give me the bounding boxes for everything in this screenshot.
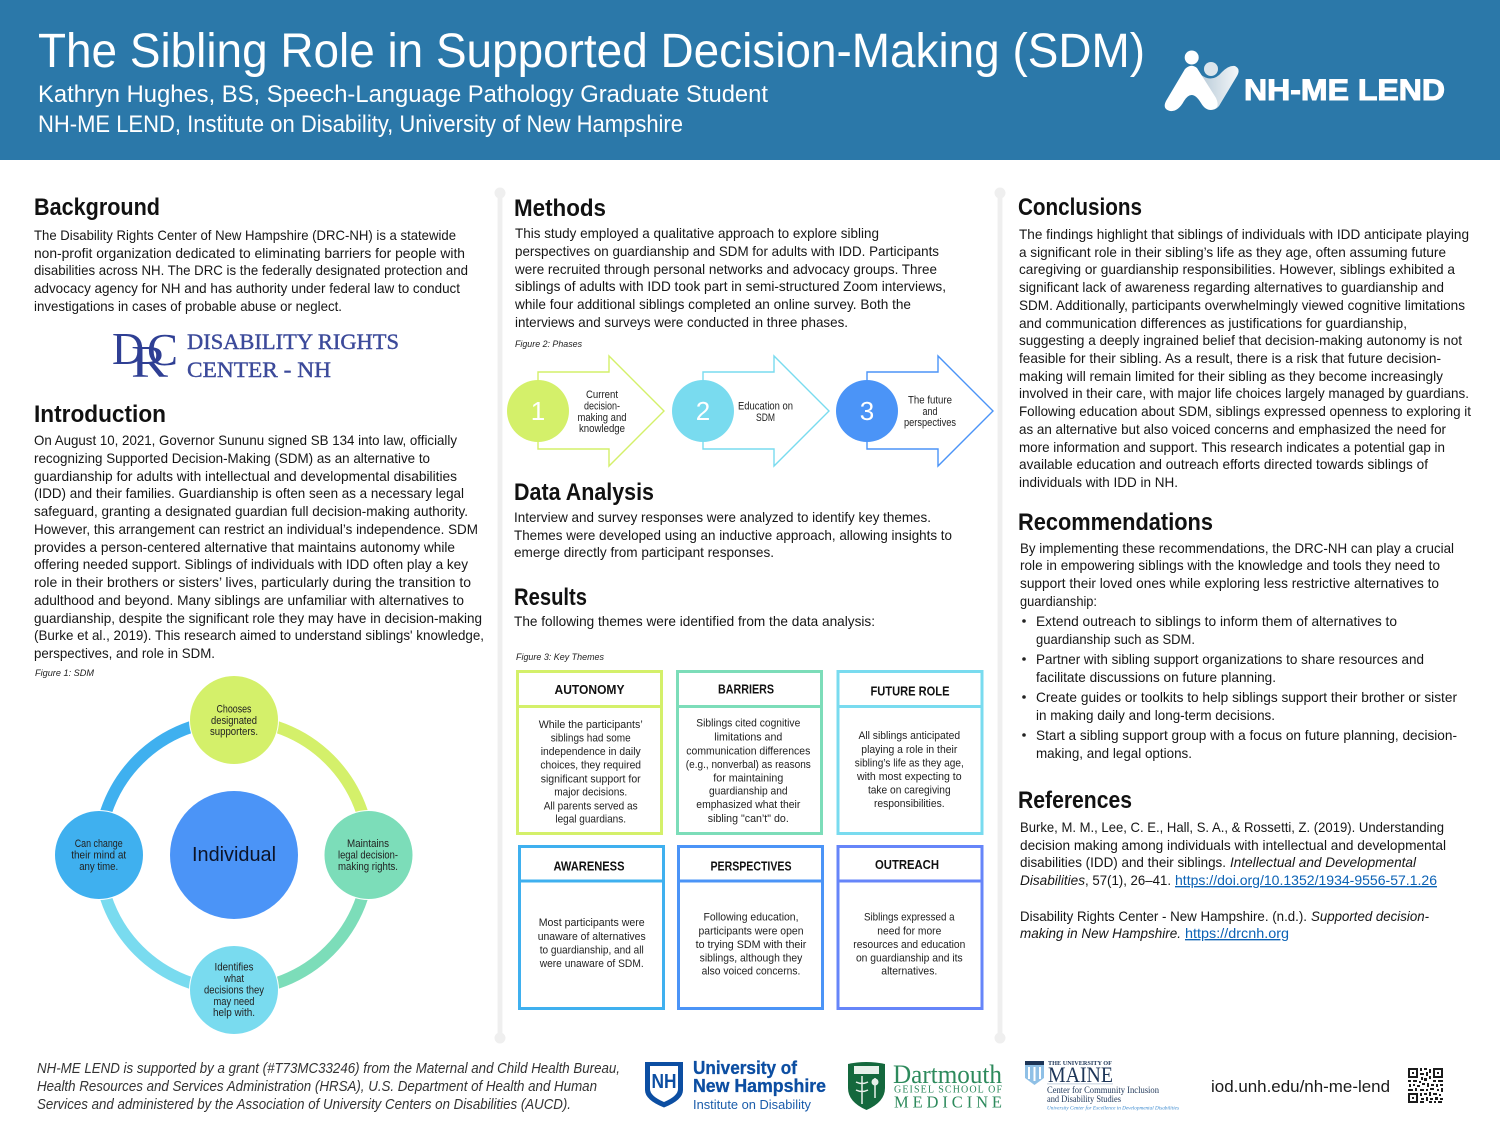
theme card: outreach: OUTREACH (875, 857, 939, 872)
reference: Burke et al.: decision making among individuals with intellectual and developmental (1020, 838, 1446, 853)
text block: introduction (34, 433, 484, 661)
bullet list: recommendations: Create guides or toolkits to help siblings support their brother or sister (1036, 690, 1457, 705)
node: can change mind: any time. (79, 861, 118, 873)
center circle (170, 791, 298, 919)
text block: methods: This study employed a qualitative approach to explore sibling (515, 226, 879, 241)
text block: introduction: perspectives, and role in SDM. (34, 646, 215, 661)
text block: recommendations intro (1020, 541, 1454, 609)
theme card: autonomy: While the participants’ (539, 719, 643, 731)
text block: background: advocacy agency for NH and has authority under federal law to conduct (34, 281, 460, 296)
theme card: perspectives: also voiced concerns. (702, 966, 800, 978)
logo: Dartmouth Geisel School of Medicine (848, 1060, 1002, 1112)
funding statement: Services and administered by the Association of University Centers on Disabilities (AUCD). (37, 1097, 571, 1113)
bullet list: recommendations: making, and legal options. (1036, 746, 1192, 761)
text block: conclusions (1019, 227, 1471, 490)
phase 3: The future (908, 394, 952, 406)
theme card: perspectives: Following education, (704, 912, 798, 924)
reference: Disability Rights Center: making in New Hampshire. (1020, 926, 1181, 941)
logo: NH-ME LEND: NH-ME LEND (1244, 74, 1445, 107)
logo: Disability Rights Center NH: D (112, 323, 144, 374)
author line: Kathryn Hughes, BS, Speech-Language Pathology Graduate Student (38, 81, 768, 108)
theme card: barriers: sibling "can’t" do. (708, 813, 789, 825)
heading: data analysis: Data Analysis (514, 479, 654, 506)
node: chooses designated supporters: designated (211, 715, 257, 727)
theme card: autonomy: independence in daily (541, 746, 641, 758)
panel: data analysis (514, 479, 952, 560)
panel: conclusions (1018, 194, 1471, 490)
text block: background: disabilities across NH. The DRC is the federally designated protection and (34, 263, 468, 278)
theme card: future role: playing a role in their (861, 744, 958, 756)
theme card: awareness: were unaware of SDM. (539, 958, 644, 970)
phase 1: 1 (531, 396, 545, 426)
theme card: future role: All siblings anticipated (858, 730, 960, 742)
logo: NH-ME LEND (1165, 50, 1445, 111)
footer (37, 1058, 1443, 1113)
reference: Burke et al. (1020, 820, 1446, 888)
text block: methods: while four additional siblings completed an online survey. Both the (514, 297, 911, 312)
text block: introduction: (Burke et al., 2019). This research aimed to understand siblings' knowledge, (34, 628, 484, 643)
text block: introduction: (IDD) and their families. Guardianship is often seen as a necessary legal (34, 486, 464, 501)
theme card: future role: responsibilities. (874, 798, 945, 810)
logo: University of New Hampshire: Institute on Disability (693, 1097, 811, 1112)
node: chooses designated supporters: Chooses (216, 704, 252, 716)
title: The Sibling Role in Supported Decision-Making (SDM) (38, 25, 1145, 78)
theme card: autonomy: AUTONOMY (554, 682, 625, 697)
theme card: barriers: limitations and (714, 731, 782, 743)
affiliation line: NH-ME LEND, Institute on Disability, University of New Hampshire (38, 111, 683, 138)
text block: data analysis: Themes were developed using an inductive approach, allowing insights to (514, 528, 952, 543)
node: maintains legal rights: making rights. (338, 861, 398, 873)
text block: data analysis: emerge directly from participant responses. (514, 545, 774, 560)
node: maintains legal rights: legal decision- (338, 850, 398, 862)
theme card: autonomy (518, 672, 662, 834)
node: can change mind: Can change (75, 838, 123, 850)
phase 3: 3 (860, 396, 874, 426)
reference: Burke et al.: , 57(1), 26–41. (1085, 873, 1171, 888)
funding statement: Health Resources and Services Administration (HRSA), U.S. Department of Health and Human (37, 1079, 597, 1095)
theme card: barriers: guardianship and (709, 786, 788, 798)
panel: methods (507, 195, 993, 466)
funding statement: NH-ME LEND is supported by a grant (#T73MC33246) from the Maternal and Child Health Bureau, (37, 1061, 620, 1077)
text block: conclusions: individuals with IDD in NH. (1019, 475, 1178, 490)
header banner (0, 0, 1500, 160)
theme card: awareness: to guardianship, and all (540, 945, 644, 957)
theme card: autonomy: choices, they required (540, 759, 641, 771)
text block: data analysis: Interview and survey responses were analyzed to identify key themes. (514, 510, 931, 525)
logo: Dartmouth Geisel School of Medicine: GEISEL SCHOOL OF (894, 1084, 1002, 1096)
logo: Disability Rights Center NH: C (147, 324, 178, 375)
process diagram: phases (507, 356, 993, 466)
text block: conclusions: and communication differences as justifications for guardianship, (1019, 316, 1407, 331)
phase 2: Education on (738, 400, 793, 412)
text block: methods: siblings of adults with IDD took part in semi-structured Zoom interviews, (515, 279, 946, 294)
theme card: perspectives (678, 846, 822, 1008)
theme card: perspectives: siblings, although they (700, 952, 803, 964)
theme card: autonomy: major decisions. (554, 787, 627, 799)
logo: Dartmouth Geisel School of Medicine: MEDICINE (894, 1092, 1002, 1112)
text: results intro: The following themes were identified from the data analysis: (514, 614, 875, 629)
panel: references (1018, 787, 1446, 941)
website url: iod.unh.edu/nh-me-lend (1211, 1077, 1390, 1096)
logo: Disability Rights Center NH (112, 323, 399, 387)
text block: conclusions: significant lack of awareness regarding alternatives to guardianship and (1019, 280, 1444, 295)
logo: Disability Rights Center NH: DISABILITY RIGHTS (187, 329, 399, 354)
heading: references: References (1018, 787, 1132, 814)
theme card: awareness: Most participants were (539, 917, 645, 929)
node: identifies decisions: Identifies (214, 962, 254, 974)
theme card: barriers: for maintaining (713, 772, 783, 784)
funding statement (37, 1061, 620, 1113)
heading: methods: Methods (514, 195, 606, 222)
theme card: perspectives: PERSPECTIVES (710, 858, 792, 874)
phase 2 (672, 356, 829, 466)
text block: introduction: On August 10, 2021, Governor Sununu signed SB 134 into law, officially (34, 433, 457, 448)
text block: recommendations intro: guardianship: (1020, 594, 1097, 609)
text block: conclusions: Following education about SDM, siblings expressed openness to exploring it (1019, 404, 1471, 419)
bullet list: recommendations: Extend outreach to siblings to inform them of alternatives to (1036, 614, 1397, 629)
text block: methods: interviews and surveys were conducted in three phases. (515, 315, 848, 330)
text block: introduction: guardianship, despite the significant role they may have in decision-making (34, 611, 482, 626)
logo: University of New Hampshire: New Hampshire (693, 1076, 826, 1096)
theme card: future role: sibling’s life as they age, (855, 757, 964, 769)
reference: Burke et al.: disabilities (IDD) and their siblings. (1020, 855, 1226, 870)
node: identifies decisions: help with. (213, 1007, 255, 1019)
logo: University of Maine CCIDS: Center for Community Inclusion (1047, 1085, 1159, 1096)
phase 1: making and (578, 412, 626, 424)
bullet list: recommendations: facilitate discussions on future planning. (1036, 670, 1276, 685)
text block: introduction: recognizing Supported Decision-Making (SDM) as an alternative to (34, 451, 430, 466)
reference: Disability Rights Center (1020, 909, 1429, 941)
text block: introduction: provides a person-centered alternative that maintains autonomy while (34, 540, 455, 555)
heading: conclusions: Conclusions (1018, 194, 1142, 221)
theme card: outreach: need for more (877, 925, 941, 937)
theme card: autonomy: siblings had some (551, 732, 631, 744)
theme card: awareness (520, 846, 664, 1008)
text block: conclusions: making will remain limited for their sibling as they become increasingly (1019, 369, 1443, 384)
logo: Dartmouth Geisel School of Medicine: Dartmouth (893, 1060, 1002, 1089)
logo: University of Maine CCIDS (1025, 1061, 1179, 1112)
node: identifies decisions (190, 946, 278, 1034)
theme card: awareness: unaware of alternatives (538, 931, 646, 943)
logo: University of Maine CCIDS: MAINE (1048, 1062, 1113, 1087)
theme card: barriers: emphasized what their (696, 799, 801, 811)
panel: background (34, 194, 468, 387)
text block: methods (514, 226, 946, 330)
reference: Burke et al.: https://doi.org/10.1352/1934-9556-57.1.26 (1175, 873, 1437, 888)
text block: data analysis (514, 510, 952, 560)
theme card: future role: with most expecting to (856, 771, 962, 783)
theme card: outreach (838, 846, 982, 1008)
caption: figure 1: Figure 1: SDM (35, 668, 94, 679)
node: identifies decisions: may need (214, 996, 254, 1008)
theme card: awareness: AWARENESS (554, 858, 625, 874)
theme card: barriers (678, 672, 822, 834)
node: can change mind (54, 810, 144, 900)
node: maintains legal rights (324, 810, 413, 900)
bullet list: recommendations (1022, 614, 1457, 761)
theme card: autonomy: All parents served as (544, 800, 638, 812)
logo: University of Maine CCIDS: and Disability Studies (1047, 1095, 1121, 1105)
logo: Disability Rights Center NH: CENTER - NH (187, 357, 331, 382)
theme card: barriers: BARRIERS (718, 682, 774, 696)
text block: introduction: role in their brothers or sisters’ lives, particularly during the transition to (34, 575, 471, 590)
phase 3: perspectives (904, 417, 957, 429)
text block: conclusions: feasible for their sibling. As a result, there is a risk that future decision- (1019, 351, 1441, 366)
theme card: barriers: Siblings cited cognitive (696, 718, 800, 730)
text block: recommendations intro: support their loved ones while exploring less restrictive alternatives to (1020, 576, 1439, 591)
text block: conclusions: a significant role in their sibling’s life as they age, often assuming future (1019, 245, 1446, 260)
phase 2: 2 (696, 396, 710, 426)
theme card: barriers: communication differences (686, 745, 811, 757)
text block: introduction: safeguard, granting a designated guardian full decision-making authority. (34, 504, 468, 519)
reference: Burke et al.: Burke, M. M., Lee, C. E., Hall, S. A., & Rossetti, Z. (2019). Understanding (1020, 820, 1444, 835)
bullet list: recommendations: guardianship such as SDM. (1036, 632, 1195, 647)
theme card: outreach: Siblings expressed a (864, 912, 955, 924)
theme card: outreach: on guardianship and its (856, 952, 963, 964)
logo: University of New Hampshire (645, 1058, 826, 1112)
phase 1: knowledge (579, 423, 625, 435)
text block: conclusions: more information and support. This research indicates a potential gap in (1019, 440, 1445, 455)
text block: conclusions: SDM. Additionally, participants overwhelmingly viewed cognitive limitations (1019, 298, 1465, 313)
node: identifies decisions: decisions they (204, 984, 265, 996)
phase 2: SDM (756, 412, 775, 424)
text block: introduction: However, this arrangement can restrict an individual’s independence. SDM (34, 522, 478, 537)
bullet list: recommendations: Start a sibling support group with a focus on future planning, decision- (1036, 728, 1457, 743)
text block: conclusions: available education and outreach efforts directed towards siblings of (1019, 457, 1428, 472)
column dividers (494, 188, 1006, 1044)
node: maintains legal rights: Maintains (347, 838, 390, 850)
heading: recommendations: Recommendations (1018, 509, 1213, 536)
theme card: perspectives: to trying SDM with their (696, 939, 807, 951)
theme card: outreach: alternatives. (881, 966, 937, 978)
logo: University of Maine CCIDS: THE UNIVERSITY OF (1048, 1061, 1112, 1067)
caption: figure 2: Figure 2: Phases (515, 339, 582, 350)
reference: Burke et al.: Intellectual and Developmental (1230, 855, 1417, 870)
heading: results: Results (514, 584, 587, 611)
phase 1 (507, 356, 664, 466)
node: chooses designated supporters (190, 676, 278, 764)
text block: methods: perspectives on guardianship and SDM for adults with IDD. Participants (515, 244, 939, 259)
logo: University of New Hampshire: NH (652, 1071, 676, 1093)
phase 3: and (922, 406, 938, 418)
theme card: autonomy: significant support for (541, 773, 641, 785)
text block: methods: were recruited through personal networks and advocacy groups. Three (514, 262, 937, 277)
reference: Disability Rights Center: Disability Rights Center - New Hampshire. (n.d.). (1020, 909, 1307, 924)
text block: introduction: adulthood and beyond. Many siblings are unfamiliar with alternatives to (34, 593, 464, 608)
text block: conclusions: involved in their care, with major life choices largely managed by guardians. (1019, 386, 1469, 401)
text block: conclusions: caregiving or guardianship responsibilities. However, siblings exhibited a (1019, 262, 1455, 277)
reference: Disability Rights Center: https://drcnh.org (1185, 926, 1289, 941)
panel: recommendations (1018, 509, 1457, 761)
node: identifies decisions: what (223, 973, 244, 985)
text block: background (34, 228, 468, 314)
bullet list: recommendations: Partner with sibling support organizations to share resources and (1036, 652, 1424, 667)
QR code (1408, 1068, 1443, 1103)
theme card: future role: take on caregiving (868, 785, 951, 797)
text block: conclusions: as an alternative but also voiced concerns and emphasized the need for (1019, 422, 1446, 437)
theme card: future role: FUTURE ROLE (870, 684, 950, 698)
theme card: autonomy: legal guardians. (555, 814, 626, 826)
text block: recommendations intro: role in empowering siblings with the knowledge and tools they need to (1020, 558, 1440, 573)
panel: results (514, 584, 982, 1008)
reference: Burke et al.: Disabilities (1020, 873, 1085, 888)
caption: figure 3: Figure 3: Key Themes (516, 652, 604, 663)
cycle diagram: SDM (54, 676, 413, 1034)
panel: introduction (34, 401, 484, 1034)
reference: Disability Rights Center: Supported decision- (1311, 909, 1429, 924)
text block: background: The Disability Rights Center of New Hampshire (DRC-NH) is a statewide (34, 228, 456, 243)
logo: University of Maine CCIDS: University Center for Excellence in Developmental Disabilities (1047, 1106, 1179, 1112)
theme card: barriers: (e.g., nonverbal) as reasons (686, 759, 811, 771)
heading: introduction: Introduction (34, 401, 166, 428)
heading: background: Background (34, 194, 160, 221)
node: chooses designated supporters: supporters. (210, 726, 258, 738)
text block: conclusions: The findings highlight that siblings of individuals with IDD anticipate playing (1019, 227, 1469, 242)
phase 3 (836, 356, 993, 466)
text block: recommendations intro: By implementing these recommendations, the DRC-NH can play a crucial (1020, 541, 1454, 556)
text block: background: non-profit organization dedicated to eliminating barriers for people with (34, 246, 465, 261)
phase 1: Current (586, 389, 618, 401)
text block: conclusions: suggesting a deeply ingrained belief that decision-making autonomy is not (1019, 333, 1462, 348)
center circle: Individual (192, 844, 276, 866)
theme card: future role (838, 672, 982, 834)
text block: background: investigations in cases of probable abuse or neglect. (34, 299, 342, 314)
phase 1: decision- (584, 400, 620, 412)
logo: Disability Rights Center NH: R (131, 336, 168, 387)
bullet list: recommendations: in making daily and long-term decisions. (1036, 708, 1275, 723)
logo: University of New Hampshire: University of (693, 1058, 798, 1078)
text block: introduction: guardianship for adults with intellectual and developmental disabilities (34, 469, 457, 484)
node: can change mind: their mind at (71, 850, 126, 862)
theme card: outreach: resources and education (853, 939, 965, 951)
theme card: perspectives: participants were open (698, 925, 804, 937)
text block: introduction: offering needed support. Siblings of individuals with IDD often play a key (34, 557, 468, 572)
